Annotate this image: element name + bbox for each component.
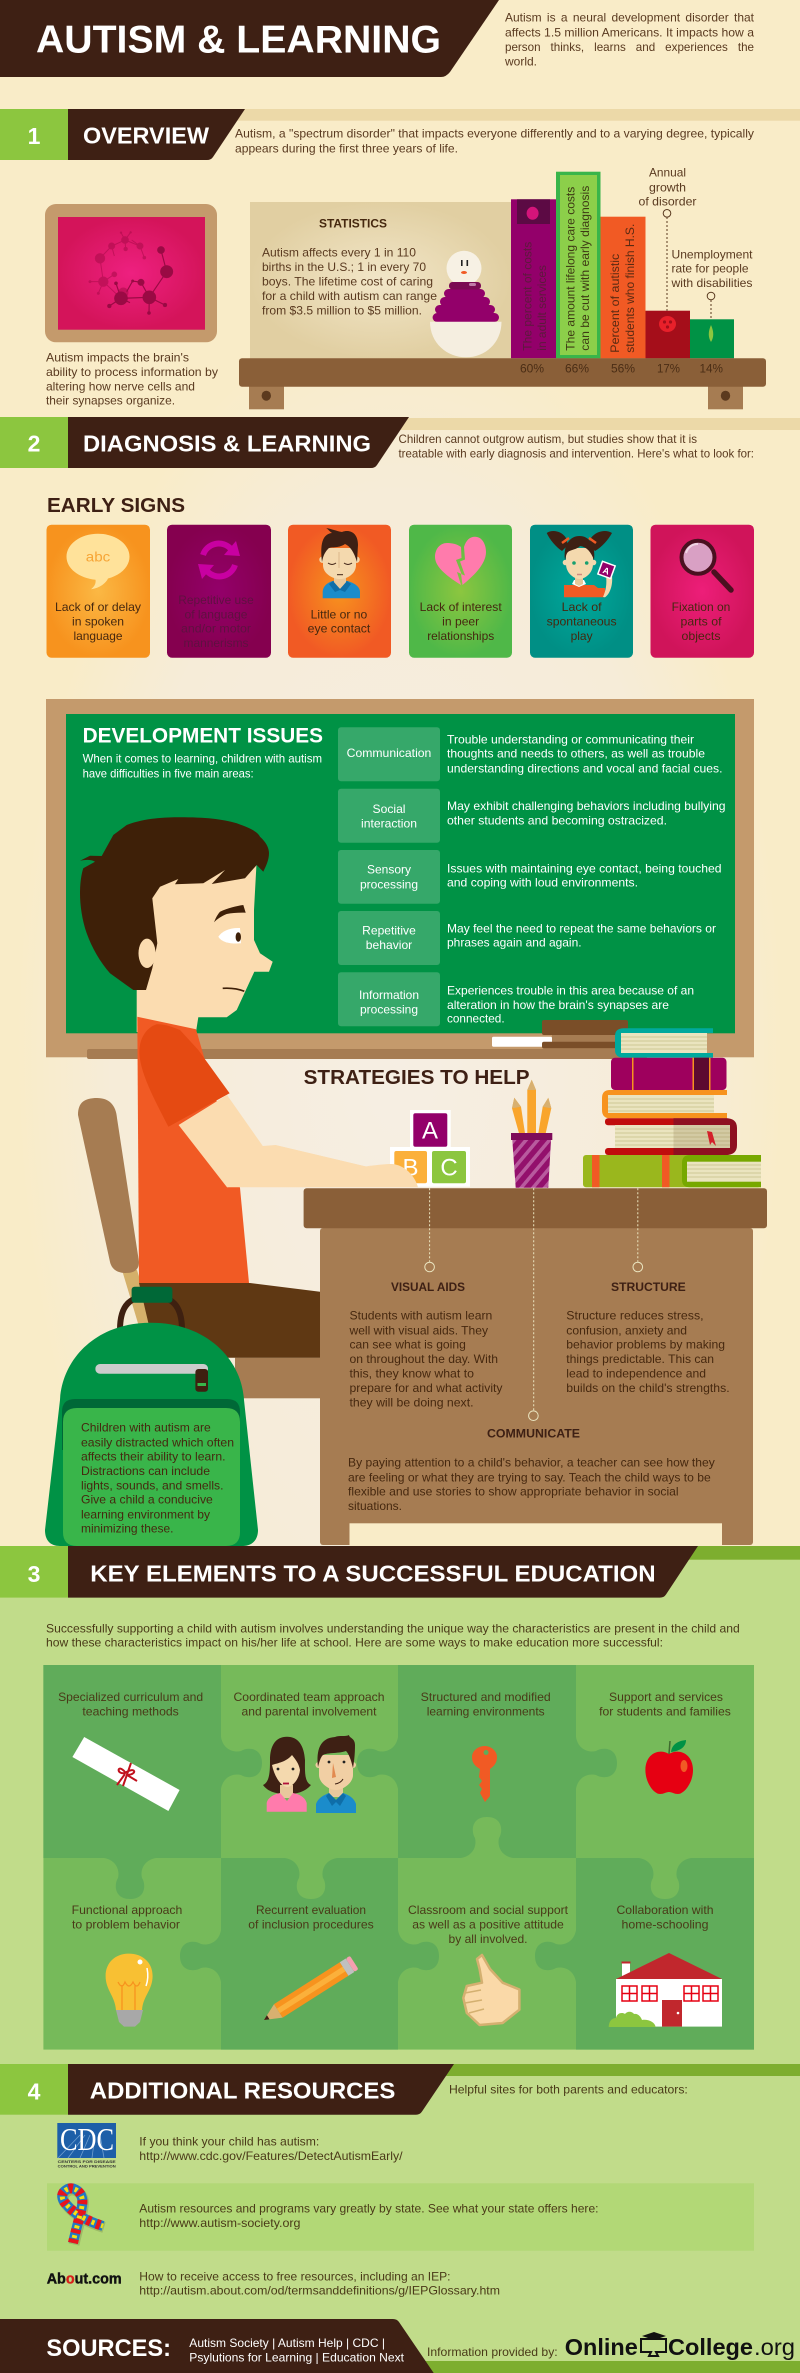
tile: classroom support (408, 1903, 569, 2025)
footer: sources: Autism Society | Autism Help | CDC | (189, 2336, 385, 2350)
tile: coordinated team: and parental involvement (242, 1704, 377, 1718)
diagnosis text: treatable with early diagnosis and intervention. Here's what to look for: (398, 446, 754, 460)
resource: CDC (57, 2121, 403, 2169)
icon: alphabet blocks: B (402, 1155, 419, 1182)
heading: early signs: EARLY SIGNS (47, 494, 185, 517)
icon: girl with letter card: A (601, 565, 611, 577)
card: spoken language: language (74, 629, 123, 643)
strategy: communicate: situations. (348, 1499, 402, 1513)
book: 56 percent: Percent of autistic (608, 254, 622, 353)
resource: CDC: http://www.cdc.gov/Features/DetectAutismEarly/ (139, 2149, 403, 2163)
title banner (0, 0, 499, 77)
card: repetitive use: of language (184, 607, 248, 621)
row: information processing: connected. (447, 1011, 505, 1025)
book: 66 percent: can be cut with early diagnosis (578, 186, 592, 351)
dotted connector: communicate (529, 1188, 538, 1420)
brain caption: Autism impacts the brain's (46, 350, 189, 364)
green background of lower sections (0, 1546, 800, 2373)
section 4 header: 4 (28, 2078, 41, 2104)
row: information processing (338, 972, 694, 1026)
card: spoken language (46, 525, 150, 658)
footer: provider: College (668, 2334, 753, 2360)
book: 60 percent: The percent of costs (521, 242, 535, 351)
footer: sources: Psylutions for Learning | Education Next (189, 2351, 405, 2365)
panel: chalkboard frame (46, 699, 754, 1057)
card: spoken language: Lack of or delay (55, 600, 141, 614)
resource: autism society band: http://www.autism-society.org (139, 2216, 300, 2230)
icon: stacking ring toy (430, 251, 502, 357)
row: sensory processing (338, 850, 722, 904)
tile: coordinated team: Coordinated team approach (234, 1690, 384, 1704)
statistics text: for a child with autism can range (262, 289, 437, 303)
tile: collaboration: Collaboration with (616, 1903, 714, 1917)
unemployment callout: with disabilities (670, 276, 752, 290)
intro text: affects 1.5 million Americans. It impacts how a (505, 25, 754, 39)
overview text: appears during the first three years of life. (235, 141, 458, 155)
tile: classroom support: Classroom and social support (408, 1903, 569, 1917)
tile: collaboration: home-schooling (622, 1917, 708, 1931)
statistics text: Autism affects every 1 in 110 (262, 246, 416, 260)
row: communication: Communication (347, 746, 431, 760)
brain caption: their synapses organize. (46, 394, 175, 408)
card: peer relationships: Lack of interest (420, 600, 502, 614)
percent labels: 60% (520, 361, 544, 375)
book: purple (611, 1058, 726, 1090)
backpack text: affects their ability to learn. (81, 1450, 226, 1464)
statistics text (262, 217, 437, 317)
icon: CDC logo (57, 2121, 117, 2169)
icon: CDC logo: CDC (60, 2121, 114, 2157)
chalk ledge (87, 1049, 647, 1059)
row: information processing: alteration in how the brain's synapses are (447, 998, 669, 1012)
overview text: Autism, a "spectrum disorder" that impacts everyone differently and to a varying degree, typically (235, 127, 754, 141)
tile: structured environments: learning environments (427, 1704, 545, 1718)
row: repetitive behavior: Repetitive (362, 924, 416, 938)
icon: CDC logo: CONTROL AND PREVENTION (58, 2165, 116, 2169)
brain caption: ability to process information by (46, 365, 218, 379)
icon: thumbs up (463, 1955, 519, 2025)
unemployment callout (670, 247, 753, 319)
backpack text: minimizing these. (81, 1522, 174, 1536)
resources intro text: Helpful sites for both parents and educators: (449, 2083, 688, 2097)
footer: provider: Online (565, 2334, 638, 2360)
section 3 header: KEY ELEMENTS TO A SUCCESSFUL EDUCATION (90, 1560, 656, 1586)
boy: shirt (137, 1017, 249, 1283)
icon: alphabet blocks: A (422, 1117, 438, 1144)
row: social interaction: May exhibit challenging behaviors including bullying (447, 799, 726, 813)
backpack text: lights, sounds, and smells. (81, 1478, 224, 1492)
percent labels: 56% (611, 361, 635, 375)
row: information processing: Experiences trouble in this area because of an (447, 984, 694, 998)
footer: provider (427, 2332, 795, 2360)
icon: alphabet blocks: C (440, 1155, 458, 1182)
row: communication (338, 727, 722, 781)
education intro text: how these characteristics impact on his/her life at school. Here are some ways to make education more successful: (46, 1636, 663, 1650)
strategy: visual aids: VISUAL AIDS (391, 1280, 465, 1294)
panel: desk (304, 1188, 767, 1547)
backpack text: Distractions can include (81, 1464, 210, 1478)
backpack text (81, 1421, 234, 1536)
intro text: Autism is a neural development disorder that (505, 11, 755, 25)
page background (0, 0, 800, 1546)
icon: key (472, 1746, 497, 1802)
book: teal (615, 1028, 713, 1058)
resource: autism society band (47, 2183, 754, 2251)
section 1 header (0, 109, 800, 160)
icon: light bulb (106, 1954, 153, 2027)
tile: recurrent evaluation (248, 1903, 374, 2027)
card: spontaneous play: play (571, 629, 593, 643)
footer: provider: .org (754, 2334, 795, 2360)
row: repetitive behavior: phrases again and again. (447, 936, 582, 950)
icon: house (609, 1953, 722, 2027)
strategy: visual aids: they will be doing next. (350, 1395, 474, 1409)
backpack text: easily distracted which often (81, 1435, 234, 1449)
backpack text: Children with autism are (81, 1421, 211, 1435)
book: 56 percent: students who finish H.S. (623, 224, 637, 353)
brain caption (46, 350, 218, 408)
statistics text: STATISTICS (319, 217, 387, 231)
section 4 header (0, 2064, 800, 2115)
footer: provider: Information provided by: (427, 2345, 558, 2359)
panel: brain picture frame (45, 204, 217, 342)
section 2 header: DIAGNOSIS & LEARNING (83, 431, 371, 457)
section 4 header: ADDITIONAL RESOURCES (90, 2078, 395, 2104)
panel: statistics backdrop (250, 202, 511, 358)
development intro text (83, 752, 322, 780)
statistics text: births in the U.S.; 1 in every 70 (262, 260, 426, 274)
tile: recurrent evaluation: of inclusion procedures (248, 1917, 374, 1931)
row: social interaction: Social (372, 802, 406, 816)
row: repetitive behavior (338, 911, 716, 965)
logo: about.com: About.com (47, 2271, 122, 2287)
row: information processing: processing (360, 1003, 418, 1017)
icon: pencil (260, 1956, 359, 2027)
strategy: structure: builds on the child's strengths. (566, 1381, 730, 1395)
icon: pencil cup (511, 1080, 552, 1188)
panel: puzzle grid (43, 1665, 754, 2050)
icon: boy with closed eyes (319, 528, 360, 598)
footer: sources (0, 2319, 434, 2373)
strategy: visual aids: can see what is going (350, 1338, 466, 1352)
development intro text: have difficulties in five main areas: (83, 766, 254, 780)
intro text: world. (504, 54, 537, 68)
strategy: structure (566, 1280, 730, 1395)
dotted connector: structure (633, 1188, 643, 1272)
chair back and leg (78, 1098, 155, 1330)
diagnosis text: Children cannot outgrow autism, but studies show that it is (398, 432, 697, 446)
card: spontaneous play (530, 525, 633, 658)
row: social interaction: other students and becoming ostracized. (447, 813, 667, 827)
tile: functional approach: to problem behavior (72, 1917, 180, 1931)
section 1 header: 1 (28, 123, 41, 149)
book: 60 percent (511, 199, 556, 358)
icon: magnifying glass (682, 541, 731, 590)
row: communication: Trouble understanding or communicating their (447, 732, 694, 746)
card: spoken language: in spoken (72, 615, 124, 629)
card: repetitive use (167, 525, 271, 658)
row: communication: thoughts and needs to others, as well as trouble (447, 747, 705, 761)
section 1 header: OVERVIEW (83, 122, 210, 148)
tile: specialized curriculum: Specialized curriculum and (58, 1690, 203, 1704)
icon: broken heart (435, 537, 486, 585)
strategy: structure: things predictable. This can (566, 1352, 714, 1366)
card: peer relationships: relationships (427, 629, 494, 643)
icon: circular arrows (198, 541, 240, 579)
strategy: structure: confusion, anxiety and (566, 1323, 687, 1337)
annual growth callout: Annual (649, 166, 686, 180)
icon: monitor with graduation cap (641, 2332, 666, 2356)
tile: structured environments (421, 1690, 551, 1802)
card: eye contact: Little or no (311, 607, 368, 621)
book: 17 percent (646, 311, 690, 358)
tile: functional approach: Functional approach (72, 1903, 182, 1917)
resource: CDC: If you think your child has autism: (139, 2134, 319, 2148)
strategy: communicate: COMMUNICATE (487, 1427, 580, 1441)
icon: parents (263, 1735, 356, 1813)
tile: classroom support: as well as a positive attitude (412, 1917, 564, 1931)
boy: legs (139, 1283, 320, 1358)
bar chart: books (511, 172, 734, 358)
card: eye contact: eye contact (308, 622, 371, 636)
resource: about.com (47, 2269, 500, 2298)
row: repetitive behavior: May feel the need to repeat the same behaviors or (447, 921, 716, 935)
book: red with bookmark (605, 1118, 737, 1155)
tile: recurrent evaluation: Recurrent evaluation (256, 1903, 366, 1917)
strategy: communicate: are feeling or what they are trying to say. Teach the child ways to be (348, 1470, 711, 1484)
title banner: AUTISM & LEARNING (36, 19, 441, 62)
icon: puzzle ribbon (62, 2188, 104, 2244)
chalk and eraser (492, 1020, 628, 1048)
shelf (239, 358, 766, 409)
tile: specialized curriculum (58, 1690, 203, 1811)
strategy: visual aids: on throughout the day. With (350, 1352, 498, 1366)
backpack text: Give a child a conducive (81, 1493, 213, 1507)
card: fixation on objects (650, 525, 754, 658)
education intro text: Successfully supporting a child with autism involves understanding the unique way the characteristics are present in the child and (46, 1621, 740, 1635)
book: 56 percent (600, 217, 646, 358)
intro text: person thinks, learns and experiences the (505, 40, 754, 54)
card: spontaneous play: spontaneous (547, 615, 617, 629)
education intro text (46, 1621, 740, 1650)
footer stripe (420, 2361, 800, 2373)
puzzle knobs (104, 1737, 617, 1982)
icon: speech bubble: abc (86, 549, 110, 565)
row: social interaction (338, 789, 726, 843)
annual growth callout (638, 166, 696, 311)
strategy: structure: Structure reduces stress, (566, 1309, 704, 1323)
strategy: visual aids: this, they know what to (350, 1366, 474, 1380)
section 3 header (0, 1546, 800, 1598)
book: 14 percent (690, 319, 734, 358)
annual growth callout: of disorder (638, 194, 696, 208)
section 2 header: 2 (28, 431, 40, 457)
strategy: communicate: flexible and use stories to show appropriate behavior in social (348, 1485, 679, 1499)
tile: support and services: Support and services (609, 1690, 723, 1704)
row: repetitive behavior: behavior (366, 938, 412, 952)
row: social interaction: interaction (361, 817, 417, 831)
brain caption: altering how nerve cells and (46, 379, 195, 393)
row: sensory processing: Issues with maintaining eye contact, being touched (447, 861, 722, 875)
diagnosis text (398, 432, 754, 460)
icon: neuron network (89, 231, 173, 315)
panel: backpack (45, 1287, 258, 1546)
panel: chalkboard (66, 714, 735, 1033)
boy: hand (227, 1145, 418, 1187)
card: fixation on objects: parts of (680, 615, 722, 629)
icon: apple (645, 1740, 693, 1794)
card: repetitive use: mannerisms (184, 636, 248, 650)
book: 60 percent: in adult services (535, 265, 549, 351)
row: sensory processing: Sensory (367, 863, 411, 877)
unemployment callout: rate for people (672, 262, 749, 276)
dotted connector: visual aids (425, 1188, 434, 1272)
icon: diploma (72, 1737, 180, 1811)
card: peer relationships (409, 525, 512, 658)
tile: functional approach (72, 1903, 182, 2027)
resource: about.com: How to receive access to free resources, including an IEP: (139, 2269, 451, 2283)
footer: sources: SOURCES: (46, 2336, 171, 2362)
icon: alphabet blocks (390, 1110, 470, 1187)
tile: coordinated team (234, 1690, 384, 1813)
statistics text: from $3.5 million to $5 million. (262, 303, 422, 317)
tile: support and services: for students and families (599, 1704, 731, 1718)
strategy: structure: STRUCTURE (611, 1280, 686, 1294)
icon: stack of books (583, 1028, 761, 1187)
section 2 header (0, 417, 800, 468)
card: spontaneous play: Lack of (562, 600, 602, 614)
section 3 header: 3 (28, 1561, 40, 1587)
tile: classroom support: by all involved. (448, 1932, 528, 1946)
book: 66 percent: The amount lifelong care costs (564, 187, 578, 351)
unemployment callout: Unemployment (672, 247, 753, 261)
percent labels: 14% (700, 361, 723, 375)
annual growth callout: growth (649, 180, 686, 194)
percent labels: 17% (657, 361, 680, 375)
seat (235, 1358, 320, 1398)
backpack text: learning environment by (81, 1507, 210, 1521)
book: orange (602, 1090, 727, 1118)
strategy: communicate (348, 1427, 715, 1513)
card: fixation on objects: objects (682, 629, 720, 643)
strategy: visual aids: well with visual aids. They (348, 1323, 488, 1337)
overview text (235, 127, 754, 155)
tile: support and services (599, 1690, 731, 1794)
book: green (583, 1155, 761, 1187)
strategy: visual aids (348, 1280, 502, 1409)
card: fixation on objects: Fixation on (672, 600, 730, 614)
row: sensory processing: processing (360, 877, 418, 891)
card: repetitive use: and/or motor (181, 622, 251, 636)
card: eye contact (288, 525, 391, 658)
percent labels (520, 361, 723, 375)
tile: structured environments: Structured and modified (421, 1690, 551, 1704)
intro text (504, 11, 755, 68)
row: sensory processing: and coping with loud environments. (447, 876, 638, 890)
statistics text: boys. The lifetime cost of caring (262, 275, 433, 289)
development intro text: When it comes to learning, children with autism (83, 752, 322, 766)
tile: collaboration (609, 1903, 722, 2027)
icon: CDC logo: CENTERS FOR DISEASE (58, 2160, 117, 2164)
boy: head and neck (80, 817, 273, 1032)
tile: specialized curriculum: teaching methods (82, 1704, 179, 1718)
strategy: communicate: By paying attention to a child's behavior, a teacher can see how they (348, 1456, 715, 1470)
row: communication: understanding directions and vocal and facial cues. (447, 761, 722, 775)
card: repetitive use: Repetitive use (178, 593, 254, 607)
percent labels: 66% (565, 361, 589, 375)
book: 66 percent (556, 172, 600, 358)
resource: autism society band: Autism resources and programs vary greatly by state. See what your state offers here: (139, 2201, 599, 2215)
card: peer relationships: in peer (442, 615, 479, 629)
row: information processing: Information (359, 988, 419, 1002)
strategy: visual aids: Students with autism learn (350, 1309, 492, 1323)
boy: arm (179, 1095, 375, 1187)
strategy: visual aids: prepare for and what activity (350, 1381, 502, 1395)
resource: about.com: http://autism.about.com/od/termsanddefinitions/g/IEPGlossary.htm (139, 2284, 500, 2298)
strategy: structure: behavior problems by making (566, 1338, 725, 1352)
heading: development issues: DEVELOPMENT ISSUES (83, 725, 323, 748)
strategy: structure: lead to independence and (566, 1366, 706, 1380)
heading: strategies to help: STRATEGIES TO HELP (304, 1066, 530, 1089)
